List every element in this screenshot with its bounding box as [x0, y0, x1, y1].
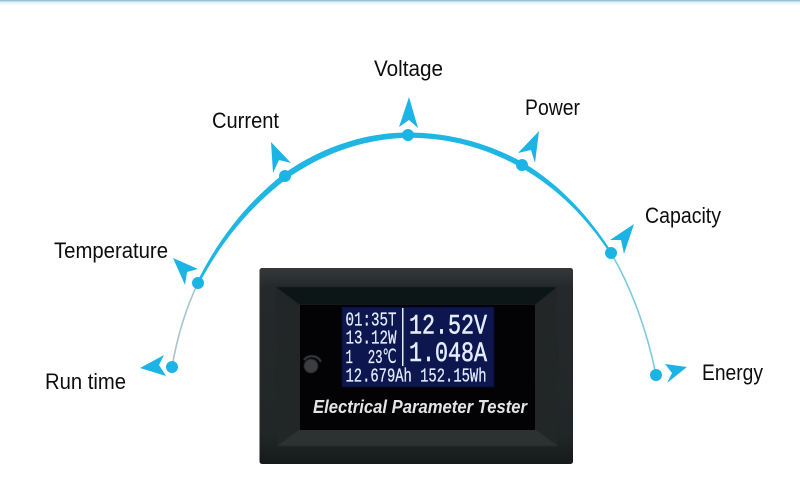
marker: Power: [516, 131, 539, 171]
marker: Current: [271, 142, 291, 182]
label: Energy: Energy: [702, 360, 763, 385]
label: Run time: Run time: [45, 369, 126, 394]
label: Power: Power: [525, 95, 580, 120]
reading: run time: 01:35T: [346, 310, 396, 332]
bezel: [276, 287, 558, 446]
OLED screen: [342, 307, 494, 387]
label: Temperature: Temperature: [54, 238, 168, 263]
screen readings: [346, 308, 487, 388]
label: Current: Current: [212, 108, 279, 133]
reading: amperage: 1.048A: [409, 339, 487, 370]
marker: Temperature: [173, 258, 204, 289]
screen divider: [402, 308, 404, 366]
device: electrical parameter tester: [260, 268, 573, 464]
reading: temperature: 1 23℃: [346, 347, 396, 369]
label: Capacity: Capacity: [645, 203, 721, 228]
reading: capacity and energy: 12.679Ah 152.15Wh: [346, 366, 486, 388]
marker: Capacity: [605, 224, 634, 259]
arc connecting parameters: [172, 132, 656, 375]
display window: [300, 305, 535, 430]
label: Voltage: Voltage: [374, 56, 443, 81]
reading: power: 13.12W: [346, 328, 397, 350]
reading: voltage: 12.52V: [409, 312, 487, 342]
marker: Run time: [140, 355, 178, 376]
device name: Electrical Parameter Tester: [313, 397, 528, 417]
knob: [304, 356, 321, 373]
marker: Voltage: [399, 97, 418, 141]
marker: Energy: [650, 364, 687, 383]
device housing: [260, 268, 573, 464]
